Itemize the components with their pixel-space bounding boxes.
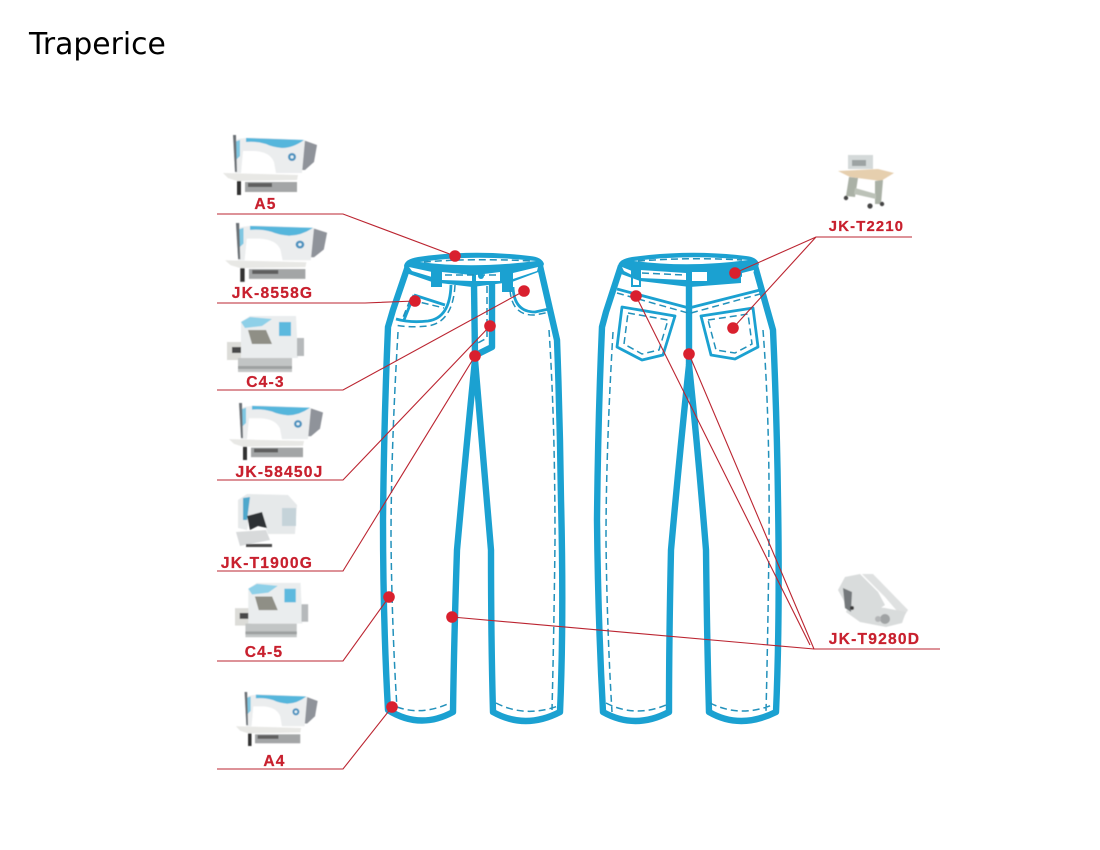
back right pocket [701, 308, 758, 359]
front outline [383, 266, 562, 721]
front waistband [404, 253, 544, 287]
label: A5: A5 [254, 196, 277, 213]
machine: JK-58450J [229, 403, 323, 460]
title: Traperice [28, 27, 166, 62]
front pockets [396, 285, 451, 322]
leader lines [217, 214, 940, 769]
label: C4-5: C4-5 [245, 644, 283, 661]
jeans: back view [597, 253, 779, 721]
label: JK-T2210: JK-T2210 [829, 219, 904, 235]
label: JK-8558G: JK-8558G [232, 285, 313, 302]
callout dots [383, 250, 741, 713]
front seam stitching [391, 330, 558, 711]
back yoke [617, 289, 760, 308]
machine: JK-T1900G [236, 494, 297, 547]
back center seam [686, 285, 692, 365]
machine: JK-8558G [225, 223, 327, 282]
jeans: front view [383, 253, 562, 721]
label: JK-T1900G: JK-T1900G [221, 555, 313, 572]
back waistband [618, 253, 759, 287]
front fly [474, 284, 492, 356]
machine: C4-5 [235, 583, 308, 637]
label: JK-58450J: JK-58450J [236, 464, 323, 481]
machine: C4-3 [227, 316, 304, 372]
label: C4-3: C4-3 [246, 374, 285, 391]
back left pocket [617, 307, 675, 360]
label: JK-T9280D: JK-T9280D [829, 631, 920, 648]
machine: JK-T9280D [838, 574, 908, 627]
machine: A4 [236, 692, 318, 746]
back seam stitching [606, 330, 772, 712]
machine: JK-T2210 [838, 155, 894, 209]
machine: A5 [223, 135, 317, 195]
back outline [597, 266, 779, 721]
label: A4: A4 [263, 753, 286, 770]
